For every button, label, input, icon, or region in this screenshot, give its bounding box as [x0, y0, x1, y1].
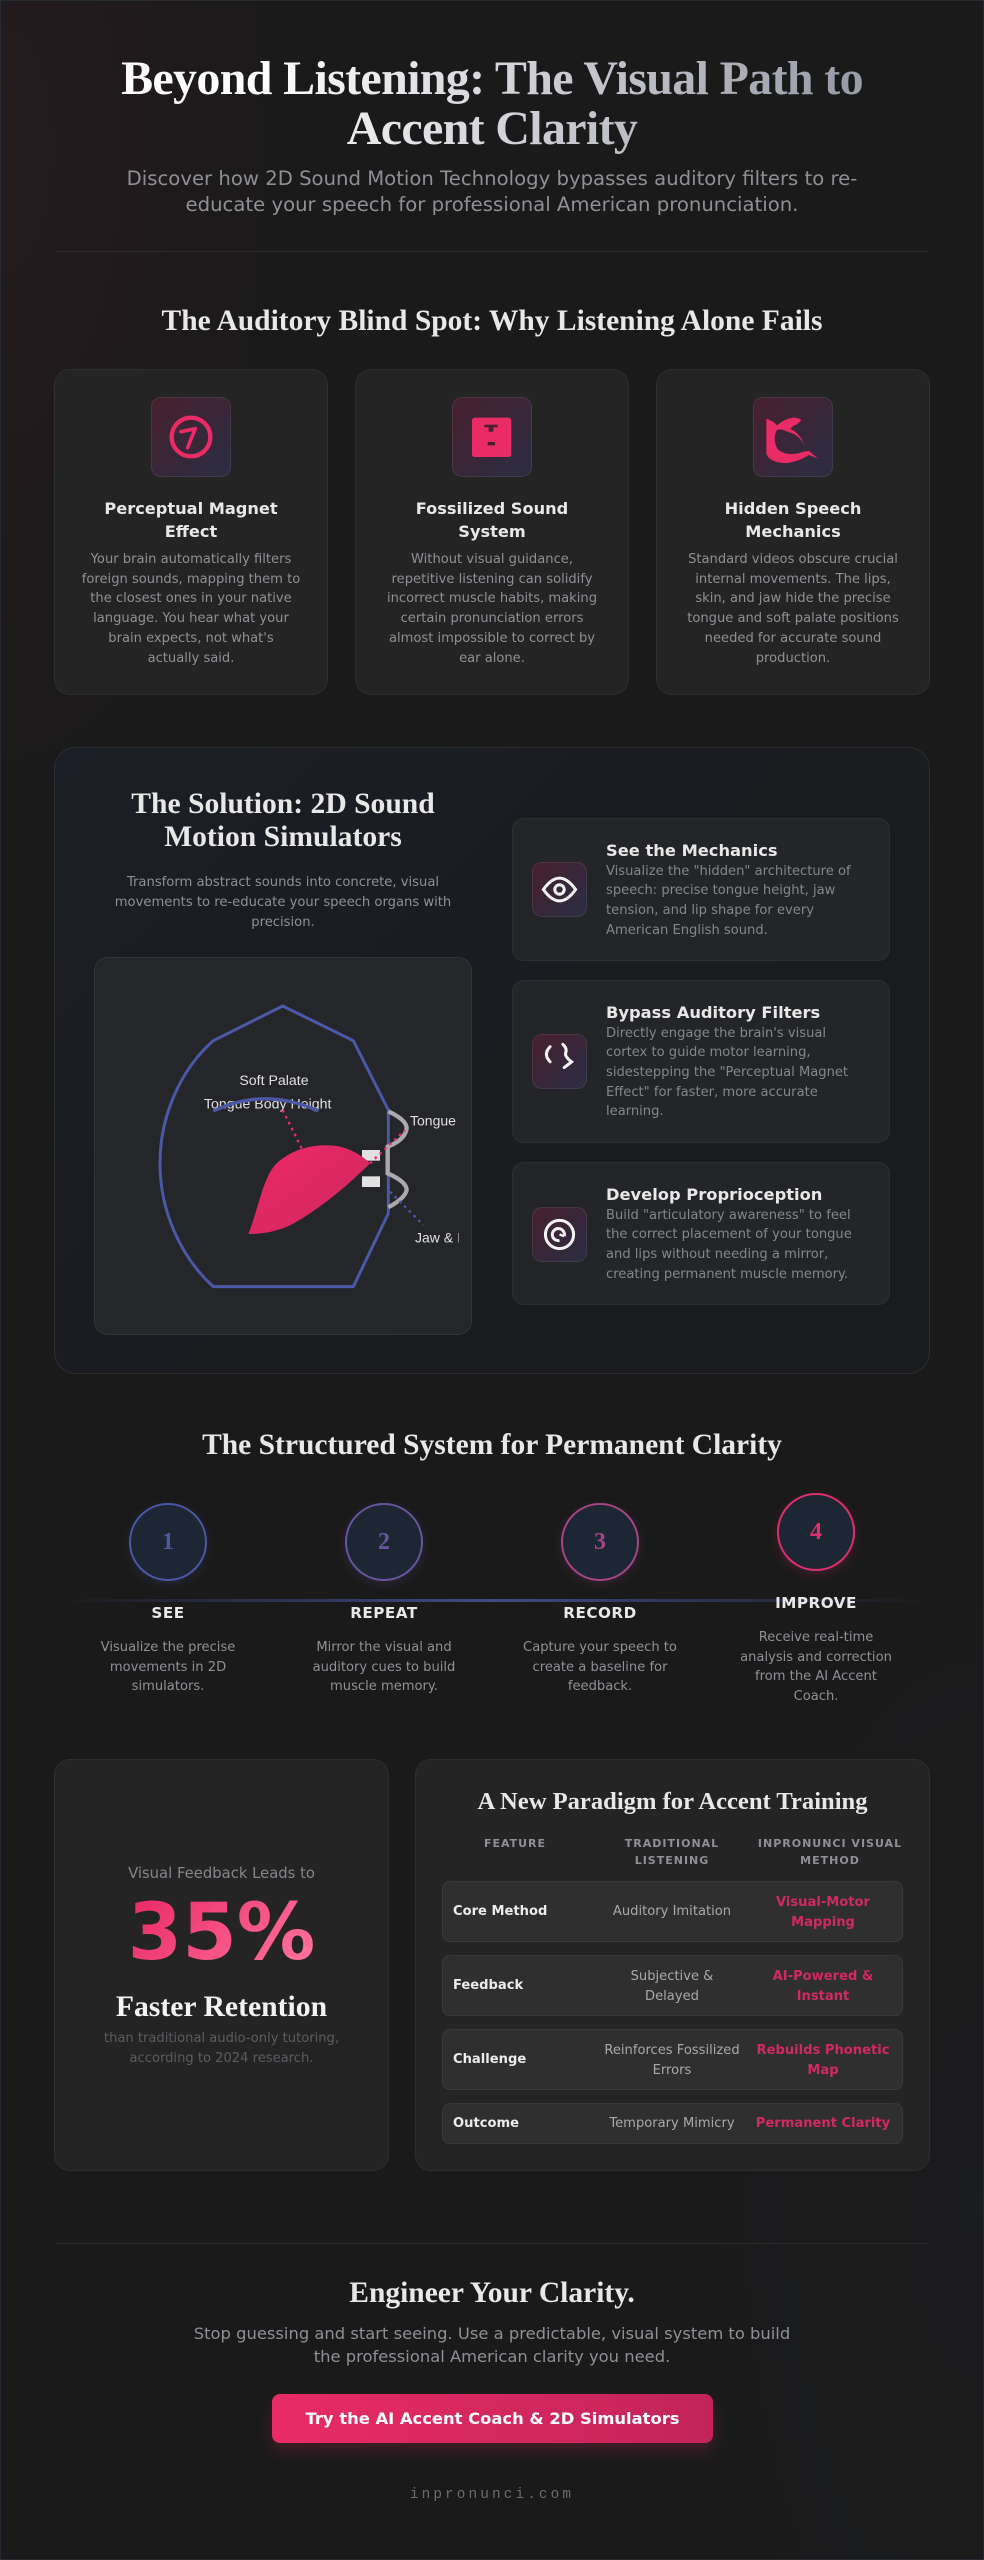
- feature text: [606, 1208, 852, 1282]
- row: feedback: [442, 1955, 903, 2016]
- feature text: [606, 864, 851, 938]
- step text: from the AI Accent: [755, 1669, 877, 1684]
- step label: REPEAT: [350, 1604, 418, 1622]
- icon: target: [532, 1207, 587, 1262]
- stat value: 35%: [128, 1887, 315, 1978]
- card text: Without visual guidance,: [411, 552, 573, 567]
- heading: solution: The Solution: 2D Sound: [131, 788, 435, 820]
- step text: auditory cues to build: [313, 1660, 455, 1675]
- step text: Coach.: [794, 1689, 838, 1704]
- chart: articulation diagram: Soft Palate: [239, 1073, 309, 1089]
- card text: Your brain automatically filters: [91, 552, 291, 567]
- step label: RECORD: [563, 1604, 637, 1622]
- panel: tongue diagram: [94, 957, 472, 1335]
- call to action text: the professional American clarity you need.: [314, 2346, 670, 2366]
- stat caption: Faster Retention: [116, 1991, 327, 2023]
- card text: language. You hear what your: [93, 611, 289, 626]
- icon: hidden mouth: [753, 397, 833, 477]
- feature text: speech: precise tongue height, jaw: [606, 883, 835, 898]
- column header: feature: FEATURE: [484, 1837, 546, 1850]
- step text: [523, 1640, 677, 1694]
- column header: traditional: LISTENING: [635, 1854, 709, 1867]
- panel: see the mechanics: [512, 818, 890, 961]
- row: core method: Visual-Motor: [776, 1895, 870, 1910]
- card title: System: [458, 522, 526, 540]
- card text: the closest ones in your native: [90, 591, 292, 606]
- step text: analysis and correction: [740, 1650, 892, 1665]
- stat label: Visual Feedback Leads to: [128, 1864, 315, 1882]
- icon: brackets: [532, 1034, 587, 1089]
- solution description: [115, 874, 451, 930]
- panel: the solution: [54, 747, 930, 1374]
- step 4: improve: [740, 1492, 892, 1704]
- feature text: creating permanent muscle memory.: [606, 1267, 848, 1282]
- subtitle: [127, 167, 857, 216]
- column header: inpronunci: [758, 1837, 902, 1867]
- title: Beyond Listening: The Visual Path to: [121, 52, 863, 105]
- panel: retention stat: [54, 1759, 389, 2170]
- step text: [313, 1640, 455, 1694]
- subtitle: Discover how 2D Sound Motion Technology bypasses auditory filters to re-: [127, 167, 857, 190]
- heading: solution: [131, 788, 435, 853]
- stat source: than traditional audio-only tutoring,: [104, 2031, 339, 2046]
- card text: internal movements. The lips,: [695, 572, 891, 587]
- card text: production.: [756, 651, 830, 666]
- card title: Hidden Speech: [725, 498, 861, 518]
- column header: traditional: [624, 1837, 719, 1867]
- footer url: inpronunci.com: [410, 2487, 574, 2503]
- feature text: Visualize the "hidden" architecture of: [606, 864, 851, 878]
- panel: perceptual magnet effect: [54, 369, 328, 694]
- card text: [82, 552, 300, 666]
- card title: [104, 498, 278, 540]
- card text: ear alone.: [459, 651, 525, 666]
- card text: Standard videos obscure crucial: [688, 552, 898, 567]
- feature text: and lips without needing a mirror,: [606, 1247, 828, 1262]
- button: call to action: [272, 2394, 713, 2443]
- card title: [416, 498, 568, 540]
- feature text: Effect" for faster, more accurate: [606, 1085, 818, 1100]
- feature text: cortex to guide motor learning,: [606, 1045, 811, 1060]
- card text: actually said.: [148, 651, 234, 666]
- feature title: Bypass Auditory Filters: [606, 1003, 820, 1022]
- feature title: See the Mechanics: [606, 841, 778, 860]
- row: core method: Core Method: [453, 1904, 547, 1919]
- row: challenge: Map: [807, 2063, 839, 2078]
- step text: feedback.: [568, 1679, 632, 1694]
- card text: foreign sounds, mapping them to: [82, 572, 300, 587]
- icon: eye: [532, 862, 587, 917]
- step 2: repeat: [313, 1503, 455, 1694]
- row: feedback: Instant: [797, 1989, 849, 2004]
- row: outcome: [442, 2103, 903, 2144]
- panel: comparison table: [415, 1759, 930, 2170]
- panel: develop proprioception: [512, 1162, 890, 1305]
- row: challenge: Challenge: [453, 2052, 526, 2067]
- chart: articulation diagram: Tongue Body Height: [204, 1096, 331, 1112]
- step text: simulators.: [132, 1679, 204, 1694]
- step text: Receive real-time: [759, 1630, 873, 1645]
- panel: hidden speech mechanics: [656, 369, 930, 694]
- panel: bypass auditory filters: [512, 980, 890, 1143]
- card title: Fossilized Sound: [416, 498, 568, 518]
- row: feedback: Delayed: [645, 1989, 699, 2004]
- card text: [387, 552, 597, 666]
- step label: IMPROVE: [775, 1594, 857, 1612]
- feature text: American English sound.: [606, 923, 768, 938]
- step text: create a baseline for: [533, 1660, 667, 1675]
- step number: 3: [594, 1529, 606, 1555]
- chart: articulation diagram: [158, 1004, 459, 1288]
- step number: [129, 1503, 207, 1581]
- card text: tongue and soft palate positions: [687, 611, 899, 626]
- row: challenge: Reinforces Fossilized: [604, 2043, 740, 2058]
- card text: repetitive listening can solidify: [392, 572, 592, 587]
- feature text: Directly engage the brain's visual: [606, 1026, 826, 1040]
- call to action text: [194, 2324, 790, 2366]
- call to action text: Stop guessing and start seeing. Use a predictable, visual system to build: [194, 2324, 790, 2342]
- step text: Visualize the precise: [101, 1640, 235, 1655]
- card text: [687, 552, 899, 666]
- chart: articulation diagram: Jaw & Lips: [415, 1230, 483, 1246]
- stat value: [54, 1885, 389, 1981]
- chart: articulation diagram: Tongue: [410, 1113, 456, 1129]
- card title: Perceptual Magnet: [104, 498, 278, 518]
- step number: 4: [810, 1519, 822, 1545]
- step text: movements in 2D: [110, 1660, 226, 1675]
- row: challenge: Rebuilds Phonetic: [756, 2043, 889, 2058]
- row: challenge: [442, 2029, 903, 2090]
- column header: inpronunci: INPRONUNCI VISUAL: [758, 1837, 902, 1850]
- card title: [725, 498, 861, 540]
- card text: incorrect muscle habits, making: [387, 591, 597, 606]
- title: [92, 54, 892, 154]
- feature text: learning.: [606, 1104, 664, 1119]
- row: feedback: Feedback: [453, 1978, 523, 1993]
- column header: inpronunci: METHOD: [800, 1854, 860, 1867]
- title: Accent Clarity: [347, 102, 637, 155]
- heading: auditory blind spot: The Auditory Blind Spot: Why Listening Alone Fails: [162, 305, 822, 337]
- card text: brain expects, not what's: [108, 631, 274, 646]
- step text: Capture your speech to: [523, 1640, 677, 1655]
- feature text: sidestepping the "Perceptual Magnet: [606, 1065, 848, 1080]
- card title: Effect: [165, 522, 217, 540]
- table heading: A New Paradigm for Accent Training: [477, 1788, 868, 1815]
- row: challenge: Errors: [653, 2063, 691, 2078]
- heading: solution: Motion Simulators: [164, 821, 402, 853]
- step number: 1: [162, 1529, 174, 1555]
- solution description: movements to re-educate your speech organs with: [115, 894, 451, 910]
- step number: [345, 1503, 423, 1581]
- row: core method: [442, 1881, 903, 1942]
- row: core method: Mapping: [791, 1915, 855, 1930]
- step 1: see: [100, 1503, 235, 1694]
- row: core method: Auditory Imitation: [613, 1904, 731, 1919]
- step text: [100, 1640, 235, 1694]
- stat source: according to 2024 research.: [130, 2051, 313, 2066]
- card text: certain pronunciation errors: [401, 611, 583, 626]
- feature text: tension, and lip shape for every: [606, 903, 814, 918]
- solution description: Transform abstract sounds into concrete, visual: [127, 874, 439, 890]
- step number: 2: [378, 1529, 390, 1555]
- feature text: the correct placement of your tongue: [606, 1227, 852, 1242]
- card text: skin, and jaw hide the precise: [695, 591, 891, 606]
- column header: traditional: TRADITIONAL: [625, 1837, 719, 1850]
- feature text: [606, 1026, 848, 1119]
- icon: magnet circle: [151, 397, 231, 477]
- heading: structured system: The Structured System for Permanent Clarity: [202, 1429, 782, 1461]
- stat source: [104, 2031, 339, 2066]
- subtitle: educate your speech for professional American pronunciation.: [186, 193, 798, 216]
- step text: [740, 1630, 892, 1704]
- heading: engineer your clarity: Engineer Your Clarity.: [349, 2277, 635, 2309]
- step label: SEE: [151, 1604, 185, 1622]
- step text: Mirror the visual and: [316, 1640, 452, 1655]
- row: feedback: Subjective &: [631, 1969, 713, 1984]
- panel: fossilized sound system: [355, 369, 629, 694]
- card text: needed for accurate sound: [705, 631, 881, 646]
- row: outcome: Permanent Clarity: [756, 2116, 890, 2131]
- card title: Mechanics: [745, 522, 841, 540]
- card text: almost impossible to correct by: [389, 631, 595, 646]
- step text: muscle memory.: [330, 1679, 438, 1694]
- step 3: record: [523, 1503, 677, 1694]
- solution description: precision.: [251, 914, 315, 930]
- feature title: Develop Proprioception: [606, 1185, 822, 1204]
- step number: [777, 1493, 855, 1571]
- row: feedback: AI-Powered &: [773, 1969, 873, 1984]
- button: call to action: Try the AI Accent Coach & 2D Simulators: [306, 2409, 679, 2428]
- row: outcome: Outcome: [453, 2116, 519, 2131]
- icon: fossil block: [452, 397, 532, 477]
- feature text: Build "articulatory awareness" to feel: [606, 1208, 851, 1222]
- row: outcome: Temporary Mimicry: [609, 2116, 735, 2131]
- step number: [561, 1503, 639, 1581]
